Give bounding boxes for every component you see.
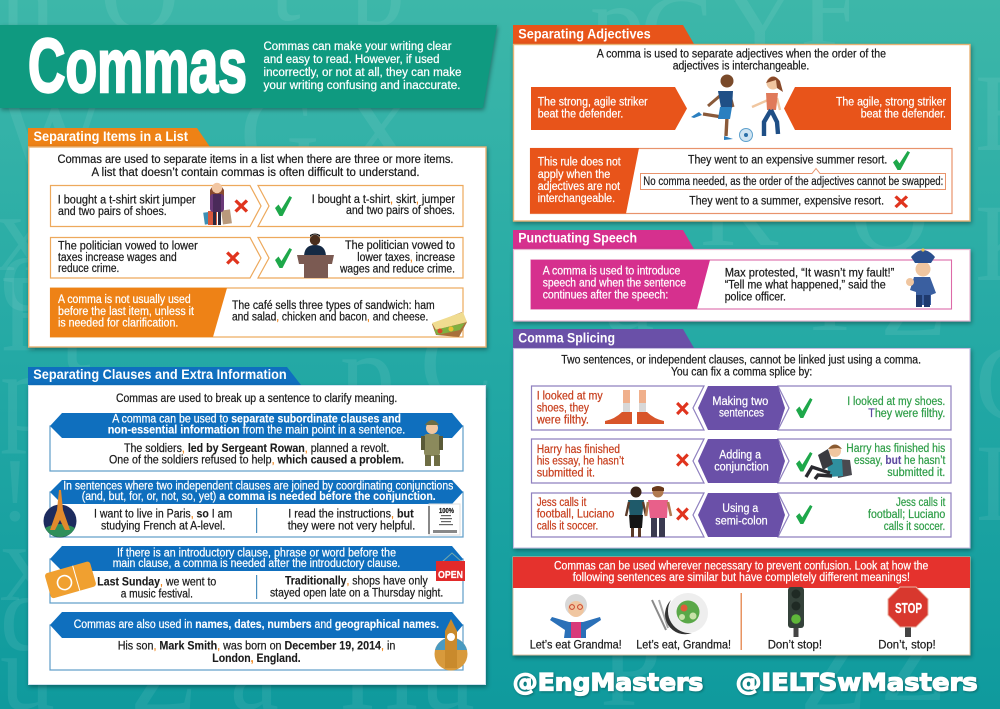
icon: tick (796, 505, 812, 524)
splice row 2 (532, 439, 951, 483)
icon: instructions sheet: 100% (439, 508, 455, 515)
intro text: Commas are used to break up a sentence to clarify meaning. (116, 393, 397, 405)
names dates numbers block: Commas are also used in names, dates, numbers and geographical names. (74, 619, 439, 631)
icon: salad plate (652, 593, 708, 634)
icon: footballers (691, 74, 783, 142)
row 1 correct (258, 186, 463, 226)
example left (531, 87, 687, 130)
splice row 2: Harry has finished his (846, 443, 946, 455)
introductory clause block: stayed open late on a Thursday night. (270, 588, 443, 600)
row 2 incorrect: reduce crime. (58, 263, 119, 275)
heading: Separating Clauses and Extra Information (33, 367, 287, 382)
splice row 2: his essay, he hasn’t (537, 455, 625, 467)
row 3 clarification: The café sells three types of sandwich: ham (232, 300, 435, 312)
icon: cross (677, 403, 688, 414)
heading: Punctuating Speech (518, 230, 637, 245)
subordinate clauses block: One of the soldiers refused to help, which caused a problem. (109, 454, 404, 466)
coordinating conjunctions block: they were not very helpful. (288, 521, 415, 533)
icon: cross (236, 200, 247, 212)
icon: cross (677, 508, 688, 520)
non-interchangeable rule: This rule does not (538, 157, 621, 169)
text: Z (880, 237, 947, 359)
heading: Separating Adjectives (518, 26, 651, 42)
intro text (597, 49, 886, 72)
icon: politician at podium (297, 234, 334, 278)
icon: open sign: OPEN (438, 570, 463, 581)
title: Commas (28, 24, 247, 109)
icon: tick (275, 248, 292, 268)
banner text: following sentences are similar but have completely different meanings! (573, 572, 910, 584)
text: p (340, 312, 395, 434)
icon: soldier (421, 420, 443, 466)
intro text (264, 41, 462, 92)
social handle: IELTSwMasters: @IELTSwMasters (736, 669, 978, 697)
intro text (58, 154, 454, 179)
coordinating conjunctions block: I read the instructions, but (288, 509, 414, 521)
icon: tick (796, 452, 812, 472)
non-interchangeable rule: They went to a summer, expensive resort. (689, 195, 884, 207)
subordinate clauses block (50, 413, 463, 471)
speech rule: police officer. (725, 291, 786, 303)
names dates numbers block: His son, Mark Smith, was born on December 19, 2014, in (118, 641, 395, 653)
names dates numbers block (50, 612, 463, 670)
icon: big ben (434, 619, 468, 670)
speech rule: speech and when the sentence (543, 277, 686, 289)
icon: cross (896, 196, 907, 207)
row 1 correct: I bought a t-shirt, skirt, jumper (312, 194, 455, 206)
row 2 incorrect: taxes increase wages and (58, 252, 177, 264)
text: C (420, 302, 493, 424)
text: X (340, 72, 419, 194)
label: Let’s eat Grandma! (530, 640, 622, 652)
non-interchangeable rule: interchangeable. (538, 193, 615, 205)
splice row 3: Jess calls it (537, 497, 587, 509)
speech rule: Max protested, “It wasn’t my fault!” (725, 267, 894, 279)
panel: separating items in a list (28, 128, 486, 347)
splice row 3 (532, 493, 951, 537)
text: d (0, 552, 55, 674)
intro text: and easy to read. However, if used (264, 54, 440, 66)
splice row 3: football, Luciano (537, 509, 614, 521)
icon: instructions sheet (428, 504, 460, 535)
callout: no comma needed: No comma needed, as the order of the adjectives cannot be swapped: (643, 176, 943, 188)
splice row 2: Harry has finished (537, 444, 620, 456)
splice row 1: I looked at my (537, 391, 603, 403)
icon: cross (227, 252, 238, 264)
text: d (0, 212, 55, 334)
row 3 clarification: before the last item, unless it (58, 306, 195, 318)
intro text: adjectives is interchangeable. (673, 60, 809, 72)
non-interchangeable rule: They went to an expensive summer resort. (688, 155, 887, 167)
icon: tick (796, 398, 812, 418)
intro text: Commas can make your writing clear (264, 41, 452, 53)
banner text (554, 560, 928, 584)
non-interchangeable rule: adjectives are not (538, 181, 621, 193)
splice row 2: submitted it. (887, 467, 945, 479)
intro text: A comma is used to separate adjectives when the order of the (597, 49, 886, 61)
icon: sandwich (432, 312, 467, 337)
non-interchangeable rule (530, 148, 952, 214)
speech rule: continues after the speech: (543, 289, 668, 301)
splice row 2: conjunction (714, 461, 769, 473)
intro text: Two sentences, or independent clauses, cannot be linked just using a comma. (561, 355, 921, 367)
intro text: A list that doesn’t contain commas is often difficult to understand. (92, 167, 420, 179)
coordinating conjunctions block: (and, but, for, or, not, so, yet) a comma is needed before the conjunction. (82, 491, 436, 503)
row 3 clarification (50, 288, 463, 337)
text: K (700, 147, 779, 269)
introductory clause block: main clause, a comma is needed after the introductory clause. (113, 558, 400, 570)
splice row 1: were filthy. (536, 415, 589, 427)
callout: no comma needed (640, 168, 946, 190)
icon: tick (893, 151, 910, 170)
text: Y (790, 232, 869, 354)
splice row 1: sentences (719, 408, 764, 420)
text: x (0, 502, 55, 624)
coordinating conjunctions block (50, 480, 463, 537)
example left: The strong, agile striker (538, 97, 648, 109)
icon: shoes (605, 390, 664, 424)
label: Don’t, stop! (878, 640, 936, 652)
icon: couple (626, 486, 671, 537)
row 2 incorrect: The politician vowed to lower (58, 240, 198, 252)
intro text: incorrectly, or not at all, they can make (264, 67, 462, 79)
intro text: You can fix a comma splice by: (671, 367, 812, 379)
panel: punctuating speech (513, 230, 970, 321)
text: , (950, 560, 970, 648)
example right: The agile, strong striker (836, 97, 946, 109)
icon: shopper (203, 183, 232, 225)
splice row 3: semi-colon (715, 515, 768, 527)
panel: separating clauses and extra information (28, 367, 486, 684)
panel: separating adjectives (513, 25, 970, 221)
icon: student reading (806, 444, 852, 479)
introductory clause block: a music festival. (121, 589, 193, 601)
introductory clause block: If there is an introductory clause, phrase or word before the (117, 547, 396, 559)
coordinating conjunctions block: In sentences where two independent clauses are joined by coordinating conjunctions (63, 480, 454, 492)
icon: stop sign (888, 587, 928, 637)
splice row 2: Adding a (719, 449, 762, 461)
text: G (240, 72, 319, 194)
intro text: your writing confusing and inaccurate. (264, 80, 460, 92)
text: p (0, 332, 55, 454)
subordinate clauses block: A comma can be used to separate subordinate clauses and (112, 414, 401, 426)
intro text: Commas are used to separate items in a list when there are three or more items. (58, 154, 454, 166)
splice row 1: shoes, they (537, 403, 589, 415)
row 2 correct: wages and reduce crime. (339, 264, 455, 276)
text: F (0, 252, 61, 374)
example right (784, 87, 951, 130)
splice row 3: football; Luciano (868, 509, 945, 521)
row 3 clarification: A comma is not usually used (58, 294, 191, 306)
subordinate clauses block: The soldiers, led by Sergeant Rowan, planned a revolt. (124, 443, 389, 455)
icon: stop sign: STOP (895, 600, 922, 617)
text: ! (0, 441, 30, 540)
icon: open sign (436, 553, 465, 581)
intro text (561, 355, 921, 379)
row 2 incorrect (50, 238, 261, 278)
subordinate clauses block: non-essential information from the main point in a sentence. (108, 425, 405, 437)
text: W (0, 72, 104, 194)
label: Let’s eat, Grandma! (636, 640, 731, 652)
row 2 correct: The politician vowed to (345, 240, 455, 252)
splice row 2: essay, but he hasn’t (854, 455, 946, 467)
panel: preventing confusion (513, 557, 970, 655)
splice row 2: submitted it. (537, 467, 595, 479)
row 3 clarification: and salad, chicken and bacon, and cheese. (232, 312, 428, 324)
introductory clause block: Traditionally, shops have only (285, 576, 428, 588)
icon: police officer (906, 248, 936, 307)
icon: traffic light (788, 587, 804, 637)
row 1 correct: and two pairs of shoes. (346, 205, 455, 217)
splice row 3: calls it soccer. (884, 521, 945, 533)
introductory clause block: Last Sunday, we went to (97, 577, 216, 589)
text: Q (850, 152, 929, 274)
social handle: EngMasters: @EngMasters (513, 669, 703, 697)
row 1 incorrect (50, 186, 261, 226)
row 3 clarification: is needed for clarification. (58, 318, 178, 330)
splice row 3: Jess calls it (896, 497, 946, 509)
title banner (0, 24, 497, 109)
row 2 correct: lower taxes, increase (357, 252, 455, 264)
heading: Separating Items in a List (34, 129, 188, 144)
example left: beat the defender. (538, 109, 623, 121)
icon: festival ticket (44, 561, 97, 599)
row 2 correct (258, 238, 463, 278)
non-interchangeable rule: apply when the (538, 169, 610, 181)
icon: grandma (550, 594, 601, 638)
splice row 3: Using a (722, 503, 759, 515)
text: t (60, 272, 91, 394)
row 1 incorrect: I bought a t-shirt skirt jumper (58, 194, 196, 206)
splice row 3: calls it soccer. (537, 521, 598, 533)
splice row 1: They were filthy. (868, 408, 945, 420)
splice row 1 (532, 386, 951, 430)
panel: comma splicing (513, 329, 970, 548)
speech rule (531, 260, 952, 309)
names dates numbers block: London, England. (212, 653, 301, 665)
speech rule: A comma is used to introduce (543, 265, 680, 277)
introductory clause block (50, 546, 463, 603)
coordinating conjunctions block: I want to live in Paris, so I am (94, 509, 232, 521)
splice row 1: I looked at my shoes. (847, 396, 945, 408)
icon: eiffel tower (44, 490, 76, 538)
heading: Comma Splicing (518, 330, 615, 345)
example right: beat the defender. (861, 109, 946, 121)
row 1 incorrect: and two pairs of shoes. (58, 206, 167, 218)
banner text: Commas can be used wherever necessary to prevent confusion. Look at how the (554, 560, 928, 572)
splice row 1: Making two (712, 396, 768, 408)
label: Don’t stop! (768, 640, 822, 652)
coordinating conjunctions block: studying French at A-level. (101, 521, 225, 533)
text: u (600, 232, 655, 354)
icon: tick (275, 196, 292, 216)
speech rule: “Tell me what happened,” said the (725, 279, 886, 291)
icon: cross (677, 454, 688, 466)
